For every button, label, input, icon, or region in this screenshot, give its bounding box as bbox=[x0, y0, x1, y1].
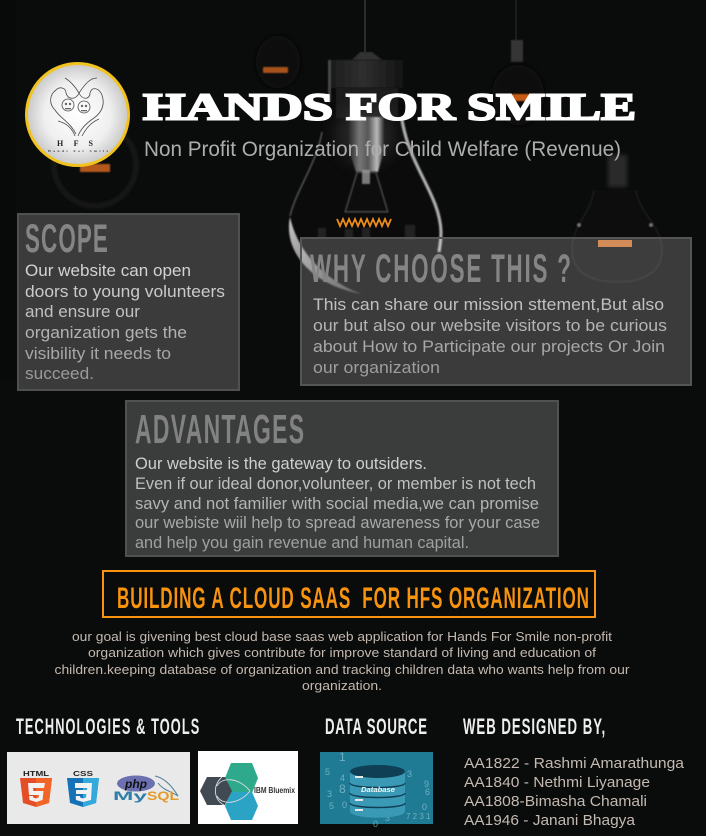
scope text: succeed. bbox=[25, 364, 94, 383]
scope text: organization gets the bbox=[25, 323, 187, 342]
designers list: AA1946 - Janani Bhagya bbox=[464, 812, 636, 829]
icon: html5: HTML bbox=[23, 771, 50, 778]
panel: ibm bluemix: IBM Bluemix bbox=[254, 786, 295, 795]
goal description: organization which gives contribute for improve standard of living and education of bbox=[88, 645, 596, 660]
scattered digits: 1 bbox=[339, 750, 346, 764]
advantages text: Even if our ideal donor,volunteer, or member is not tech bbox=[135, 475, 536, 493]
background bulb: behind logo bbox=[54, 0, 136, 206]
bulb glass highlights bbox=[402, 120, 441, 252]
panel: technology logos bbox=[7, 752, 190, 824]
why choose text: This can share our mission sttement,But also bbox=[313, 295, 664, 314]
scope text: and ensure our bbox=[25, 302, 140, 321]
scope text bbox=[25, 261, 225, 383]
designers list: AA1840 - Nethmi Liyanage bbox=[464, 774, 650, 791]
scattered digits: 3 bbox=[407, 769, 412, 779]
scope text: visibility it needs to bbox=[25, 344, 171, 363]
logo caption: Hands For Smile bbox=[48, 149, 108, 153]
goal description: our goal is givening best cloud base saas web application for Hands For Smile non-profit bbox=[72, 629, 612, 644]
icon: html5 bbox=[20, 771, 52, 807]
scattered digits: 0 bbox=[342, 800, 347, 810]
scattered digits: 7 2 3 1 bbox=[406, 812, 431, 821]
scattered digits: 4 bbox=[340, 773, 345, 783]
advantages text: and help you gain revenue and human capital. bbox=[135, 534, 469, 552]
title bbox=[143, 86, 636, 128]
scattered digits: 5 bbox=[329, 801, 334, 811]
icon: php mysql: SQL bbox=[147, 789, 179, 803]
why choose heading: WHY CHOOSE THIS ? bbox=[310, 246, 571, 291]
scattered digits: 6 bbox=[425, 787, 430, 797]
heading: data source: DATA SOURCE bbox=[325, 715, 427, 739]
logo heart of hands with two children bbox=[51, 78, 103, 136]
icon: css3: CSS bbox=[73, 771, 93, 778]
why choose text: our organization bbox=[313, 358, 440, 377]
panel: advantages bbox=[126, 401, 558, 556]
designers list: AA1822 - Rashmi Amarathunga bbox=[464, 755, 685, 772]
heading: web designed by: WEB DESIGNED BY, bbox=[463, 715, 605, 739]
callout: project title: BUILDING A CLOUD SAAS FOR HFS ORGANIZATION bbox=[117, 582, 589, 615]
scope heading: SCOPE bbox=[25, 216, 108, 261]
advantages text: our webiste wiil help to spread awareness for your case bbox=[135, 514, 540, 532]
scope text: doors to young volunteers bbox=[25, 282, 225, 301]
title: SMILE bbox=[467, 86, 636, 128]
panel: database image bbox=[320, 750, 433, 829]
icon: database cylinder: Database bbox=[361, 787, 395, 794]
background bulb: upper right bbox=[492, 0, 544, 125]
goal description: children.keeping database of organization and tracking children data who wants help from our bbox=[54, 662, 630, 677]
why choose text: about How to Participate our projects Or Join bbox=[313, 337, 665, 356]
title: FOR bbox=[346, 86, 456, 128]
scattered digits: 0 bbox=[373, 819, 378, 829]
advantages text: savy and not familier with social media,we can promise bbox=[135, 495, 539, 513]
designers list: AA1808-Bimasha Chamali bbox=[464, 793, 647, 810]
panel: scope bbox=[18, 214, 239, 390]
heading: technologies and tools: TECHNOLOGIES & TOOLS bbox=[16, 714, 199, 739]
panel: ibm bluemix bbox=[198, 751, 298, 824]
icon: css3 bbox=[67, 771, 99, 807]
icon: hexagons bbox=[200, 763, 258, 820]
scope text: Our website can open bbox=[25, 261, 191, 280]
designers list bbox=[464, 755, 685, 829]
title: HANDS bbox=[143, 86, 333, 128]
advantages text bbox=[135, 455, 540, 552]
why choose text: our but also our website visitors to be curious bbox=[313, 316, 667, 335]
callout: project title bbox=[103, 571, 595, 617]
scattered digits: 8 bbox=[339, 782, 346, 796]
icon: php mysql: My bbox=[113, 789, 148, 803]
scattered digits: 0 bbox=[422, 802, 427, 812]
panel: why choose this bbox=[301, 238, 691, 385]
why choose text bbox=[313, 295, 667, 377]
central light bulb bbox=[289, 0, 442, 298]
glowing filament bbox=[337, 219, 391, 226]
scattered digits: 3 bbox=[327, 789, 332, 799]
scattered digits: 3 bbox=[385, 813, 390, 823]
icon: php mysql bbox=[113, 776, 179, 803]
advantages text: Our website is the gateway to outsiders. bbox=[135, 455, 427, 473]
icon: php mysql: php bbox=[124, 777, 147, 791]
scattered digits: 5 bbox=[325, 767, 330, 777]
advantages heading: ADVANTAGES bbox=[135, 407, 304, 453]
logo badge bbox=[26, 64, 128, 166]
scattered digits bbox=[325, 750, 431, 829]
subtitle: Non Profit Organization for Child Welfare (Revenue) bbox=[144, 138, 621, 161]
background bulb: upper left bbox=[256, 0, 300, 88]
scattered digits: 9 bbox=[424, 779, 429, 789]
goal description bbox=[54, 629, 630, 693]
background bulb: lower right bbox=[572, 0, 662, 282]
logo initials: H F S bbox=[57, 139, 94, 148]
goal description: organization. bbox=[302, 678, 382, 693]
